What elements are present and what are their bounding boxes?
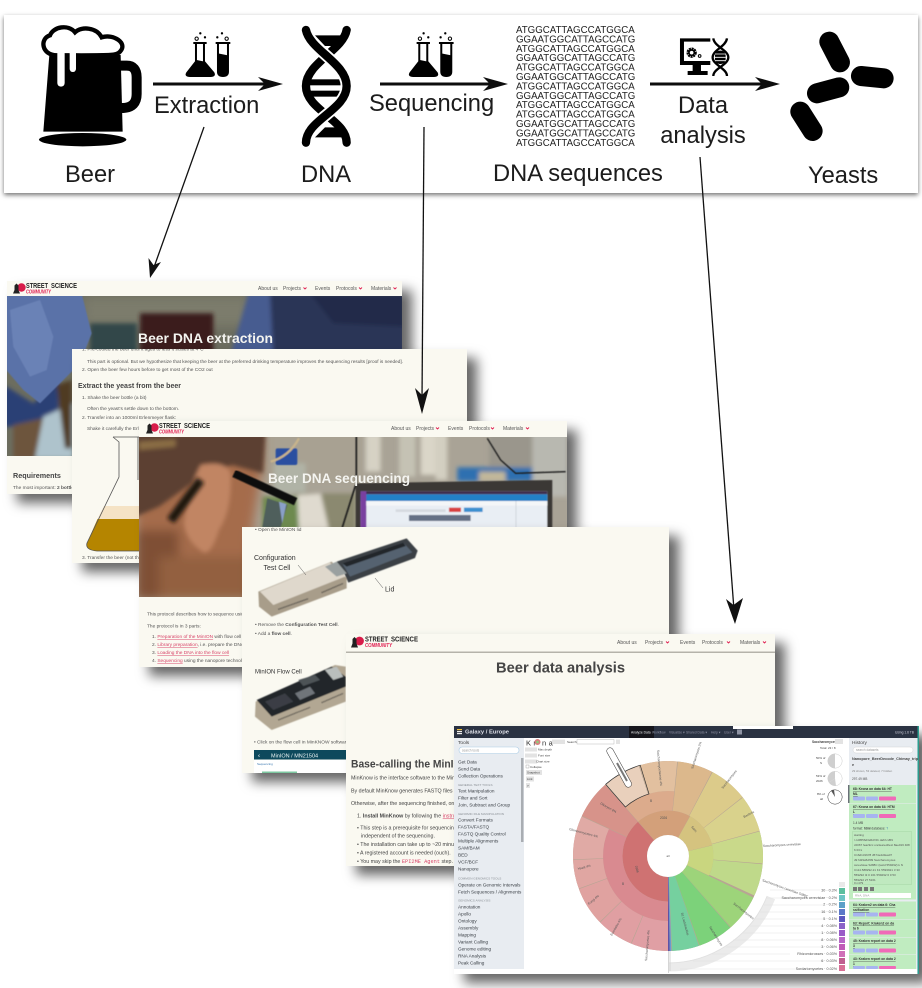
- heading: Beer DNA sequencing: Beer DNA sequencing: [268, 471, 410, 486]
- tools panel: GENOMIC FILE MANIPULATION: [458, 812, 504, 816]
- text: base-calling instructions: 1. Install MinKnow by following the instructions: [357, 814, 470, 820]
- Krona chart labels: Saccharomyces: [721, 769, 738, 790]
- navigation: Protocols: [336, 286, 357, 292]
- text: protocol introduction: The protocol is in 3 parts:: [147, 624, 201, 630]
- history dataset items: 64: Kraken2 on data 6: Cha: [853, 903, 895, 907]
- history dataset items: C16d131678 d574e4d3ea07: [854, 853, 892, 857]
- history dataset items: d9 fd29a5df09 Saccharomyces: [854, 858, 896, 862]
- navigation: About us: [617, 640, 637, 646]
- text block: DNA sequences: ATGGCATTAGCCATGGCA: [516, 44, 635, 55]
- tools panel: search tools: [462, 748, 480, 752]
- tools panel: FASTQ Quality Control: [458, 832, 506, 836]
- panel: MinION flow cell page: [242, 527, 669, 773]
- Krona legend: 1 · 0.08%: [821, 931, 838, 935]
- Krona legend: 2 · 0.2%: [823, 902, 838, 906]
- Krona chart labels: Saccharomycetes 4%: [644, 930, 651, 961]
- ring: species level: [573, 761, 678, 951]
- text: extraction steps: [82, 395, 179, 561]
- navigation: [258, 286, 396, 292]
- text: extraction steps: 2. Transfer into an 1000ml Erlenmeyer flask:: [82, 415, 176, 421]
- tools panel: Get Data: [458, 760, 477, 764]
- label: Beer: Beer: [65, 162, 115, 188]
- Krona controls: na: [542, 738, 555, 748]
- history dataset items: 1.4 MB: [853, 821, 863, 825]
- selected segment outline: [606, 765, 649, 807]
- illustration: Erlenmeyer flask: [86, 436, 139, 552]
- text block: DNA sequences: ATGGCATTAGCCATGGCA: [516, 63, 635, 74]
- text block: DNA sequences: ATGGCATTAGCCATGGCA: [516, 100, 635, 111]
- header bar: [346, 636, 775, 653]
- tools panel: Ontology: [458, 918, 477, 924]
- text: protocol introduction: 4. Sequencing using the nanopore technolog: [152, 658, 248, 664]
- logo: Street Science Community: SCIENCE: [391, 634, 418, 643]
- Krona controls: Search:: [567, 740, 578, 744]
- navigation: Materials: [740, 640, 761, 646]
- text: requirements intro: The most important: 2 bottles: [13, 485, 77, 491]
- text: protocol introduction: 1. Preparation of the MinION with flow cell a: [152, 634, 246, 640]
- Krona legend: Rhizomicrosses · 0.03%: [797, 952, 838, 956]
- Krona details and pies: 2026: [816, 779, 823, 783]
- icon: flask and tube for sequencing: [410, 32, 454, 76]
- tools panel: Multiple Alignments: [458, 838, 499, 844]
- text: protocol introduction: [147, 612, 248, 664]
- ring: genus level: [603, 791, 674, 921]
- history dataset items: 559292 t3 0 161 559292 6 0 53: [854, 873, 896, 877]
- navigation: Protocols: [702, 640, 723, 646]
- Krona chart labels: all: [666, 854, 670, 858]
- text: protocol introduction: This protocol describes how to sequence using: [147, 612, 247, 618]
- tools panel: Nanopore: [458, 866, 479, 872]
- panel: Beer DNA sequencing page: [136, 421, 572, 667]
- screenshot: MinKNOW header: ‹: [258, 754, 260, 760]
- label: Data analysis: analysis: [660, 123, 746, 149]
- logo: Street Science Community: SCIENCE: [184, 423, 210, 430]
- Krona controls: Chart size: [536, 760, 550, 764]
- panel: workflow overview: [4, 15, 918, 193]
- text: click flow cell: • Click on the flow cell in MinKNOW software: [254, 740, 349, 746]
- tools panel: Peak Calling: [458, 960, 485, 966]
- history dataset items: 0 n479: [854, 881, 864, 885]
- history dataset items: / cd9556d3a5d7db da6f cd59: [854, 838, 893, 842]
- Krona legend: 5 · 0.1%: [823, 917, 838, 921]
- text: base-calling instructions: • A registered account is needed (ouch).: [357, 850, 451, 856]
- Krona details and pies: all: [820, 797, 823, 801]
- Krona controls: Collapse: [530, 765, 542, 769]
- logo: Street Science Community: SCIENCE: [51, 283, 77, 290]
- tools panel: [454, 738, 524, 974]
- Galaxy top bar: Shared Data ▾: [686, 730, 707, 734]
- tools panel: Apollo: [458, 912, 471, 916]
- Krona chart labels: Eurotiales 4%: [609, 917, 623, 936]
- history dataset items: ML: [853, 792, 858, 796]
- tools panel: Convert Formats: [458, 818, 494, 822]
- text: protocol steps: This part is optional. But we hypothesize that keeping the beer at the preferred drinking temperature improves the sequencing results [proof is needed].: [87, 359, 403, 365]
- Krona chart labels: Saccharomyces cerevisiae S288C: [762, 878, 809, 899]
- tools panel: Assembly: [458, 926, 479, 930]
- label: Extraction: Extraction: [154, 93, 259, 119]
- Krona legend: 3 · 0.06%: [821, 945, 838, 949]
- icon: beer mug: [39, 27, 137, 146]
- text: base-calling instructions: independent of the sequencing.: [361, 834, 435, 840]
- navigation: Materials: [503, 426, 524, 432]
- tools panel: RNA Analysis: [458, 954, 487, 958]
- Krona controls: [525, 738, 620, 788]
- logo: Street Science Community: COMMUNITY: [26, 289, 52, 295]
- history dataset items: 559292 27 5161: [854, 878, 876, 882]
- Krona chart labels: Dikaryon 8%: [600, 801, 617, 814]
- text: remove and add instructions: • Add a flow cell.: [255, 631, 292, 637]
- navigation: Projects: [645, 640, 664, 646]
- Krona chart labels: Saccharomyces cerevisiae: [763, 842, 801, 848]
- history panel: History: [852, 740, 868, 746]
- callout lines: [298, 565, 383, 588]
- Galaxy top bar: Analyze Data: [631, 730, 651, 734]
- Krona legend: 6 · 0.03%: [821, 959, 838, 963]
- tools panel: GENERAL TEXT TOOLS: [458, 783, 493, 787]
- history panel: [848, 726, 919, 974]
- arrow: extraction to extraction page: [148, 127, 204, 278]
- photo: gloved hands: [3, 293, 405, 458]
- Krona details and pies: 8% of: [817, 792, 825, 796]
- history dataset items: ta 6: [853, 926, 859, 930]
- label: DNA sequences: DNA sequences: [493, 161, 663, 187]
- label: Data analysis: Data: [678, 93, 729, 119]
- text: protocol steps: 1. Pre-cooled the beer until it ages to less it scales at 4°C: [82, 346, 204, 352]
- Krona chart labels: Saccharomycetes: [732, 902, 755, 921]
- tools panel: Genome editing: [458, 946, 491, 952]
- Krona chart labels: B1 Lactobacillus: [680, 912, 690, 936]
- navigation: Materials: [371, 286, 392, 292]
- screenshot: MinKNOW header: MinION / MN21504: [271, 754, 318, 760]
- panel: Galaxy Europe Krona screenshot: [454, 712, 919, 988]
- history dataset items: 3: [853, 944, 855, 948]
- logo: Street Science Community: COMMUNITY: [159, 429, 185, 435]
- tools panel: FASTA/FASTQ: [458, 824, 490, 830]
- photo: MinION flow cell: [255, 665, 346, 730]
- text: base-calling instructions: • You may skip the EPI2ME Agent step.: [357, 859, 453, 865]
- history dataset items: ssification: [853, 908, 869, 912]
- Krona chart labels: Sacc: [690, 825, 698, 833]
- wedges spanning genus and species: [582, 762, 763, 896]
- history dataset items: [848, 785, 917, 974]
- Galaxy top bar: Visualize ▾: [669, 730, 685, 734]
- text block: DNA sequences: ATGGCATTAGCCATGGCA: [516, 110, 635, 121]
- screenshot: MinKNOW header: [254, 750, 346, 773]
- label: DNA: DNA: [301, 162, 351, 188]
- history dataset items: 67: Krona on data 64: HTM: [853, 805, 895, 809]
- history dataset items: 68: Krona on data 64: HT: [853, 787, 892, 791]
- Krona chart labels: B: [650, 799, 652, 803]
- tools panel: Filter and Sort: [458, 796, 488, 800]
- text: base-calling instructions: [351, 776, 454, 864]
- heading: Base-calling the MinION: Base-calling the MinION: [351, 758, 469, 770]
- text: base-calling instructions: Otherwise, after the sequencing finished, one: [351, 801, 457, 807]
- tools panel: SAM/BAM: [458, 846, 480, 850]
- tools panel: Mapping: [458, 932, 476, 938]
- Krona controls: Snapshot: [527, 770, 540, 774]
- Krona legend: Saccharomyces cerevisiae · 0.2%: [781, 896, 838, 900]
- tools panel: Fetch Sequences / Alignments: [458, 890, 522, 894]
- tools panel: BED: [458, 852, 468, 858]
- text block: DNA sequences: GGAATGGCATTAGCCATG: [516, 53, 635, 64]
- panel: Beer data analysis page: [346, 634, 775, 866]
- logo: Street Science Community: COMMUNITY: [365, 643, 393, 649]
- heading: Beer data analysis: Beer data analysis: [496, 660, 625, 676]
- Krona chart labels: Glomeromycetes 4%: [569, 827, 599, 839]
- logo: Street Science Community: STREET: [365, 634, 388, 643]
- Krona legend: 30 · 0.3%: [821, 888, 838, 892]
- Galaxy top bar: Using 1.6 TB: [895, 730, 915, 734]
- Krona sunburst chart: [573, 748, 763, 951]
- Krona legend: 4 · 0.08%: [821, 924, 838, 928]
- Krona chart labels: 2026: [660, 816, 667, 820]
- wedges spanning all rings: [668, 866, 754, 951]
- history panel: 297.49 MB: [852, 777, 867, 781]
- arrow: data analysis to analysis page: [700, 157, 743, 624]
- label: MinION Flow Cell: MinION Flow Cell: [255, 670, 302, 676]
- history dataset items: 45: Kraken report on data 2: [853, 939, 896, 943]
- navigation: About us: [391, 426, 411, 432]
- arrow: extraction: [153, 77, 283, 91]
- Krona details and pies: [812, 739, 845, 887]
- tools panel: Variant Calling: [458, 940, 489, 944]
- Krona controls: Max depth: [538, 748, 552, 752]
- panel: yeast extraction protocol page: [72, 346, 467, 563]
- history dataset items: C114.588292.21 K1 5593921 3 33: [854, 868, 900, 872]
- label: Configuration Test Cell: Test Cell: [264, 565, 291, 572]
- centre hole: [647, 835, 689, 877]
- text block: DNA sequences: [516, 25, 635, 149]
- tools panel: Annotation: [458, 904, 481, 910]
- history dataset items: 6 03 k: [854, 848, 863, 852]
- navigation: Events: [315, 286, 331, 292]
- text: extraction steps: 1. Shake the beer bottle (a bit): [82, 395, 147, 401]
- header bar: [139, 421, 567, 436]
- logo: Street Science Community: [146, 423, 210, 435]
- icon: DNA helix: [306, 30, 347, 143]
- navigation: Projects: [416, 426, 435, 432]
- Krona controls: Font size: [538, 754, 551, 758]
- Krona controls: Link: [527, 777, 533, 781]
- text: open the lid: • Open the MinION lid: [255, 527, 302, 533]
- heading: Requirements: Requirements: [13, 471, 61, 480]
- header bar: [7, 281, 402, 296]
- text block: DNA sequences: GGAATGGCATTAGCCATG: [516, 128, 635, 139]
- Krona controls: Kr: [526, 738, 538, 748]
- text: base-calling instructions: • This step is a prerequisite for sequencing: [357, 826, 457, 832]
- Krona legend leader lines: [680, 890, 824, 969]
- tools panel: Send Data: [458, 766, 481, 772]
- history panel: e: [852, 763, 854, 767]
- history dataset items: 63: Report: Kraken2 on da: [853, 922, 894, 926]
- text: base-calling instructions: • The installation can take up to ~20 minutes: [357, 842, 461, 848]
- text block: DNA sequences: GGAATGGCATTAGCCATG: [516, 119, 635, 130]
- Krona chart labels: B: [622, 882, 624, 886]
- history dataset items: format: html database: ?: [853, 826, 888, 830]
- text: base-calling instructions: By default MinKnow generates FASTQ files (basecalled): [351, 788, 483, 794]
- navigation: [391, 426, 529, 432]
- text: extraction steps: 3. Transfer the beer (not the foam): [82, 555, 155, 561]
- history panel: 29 shown, 53 deleted, 7 hidden: [852, 769, 893, 773]
- tools panel: Tools: [458, 740, 470, 746]
- Krona chart labels: Bacteria: [743, 810, 755, 819]
- icon: yeasts: [800, 42, 884, 131]
- text: protocol steps: 2. Open the beer few hours before to get most of the CO2 out: [82, 367, 213, 373]
- heading: Extract the yeast from the beer: Extract the yeast from the beer: [78, 383, 181, 390]
- Galaxy top bar: Help ▾: [711, 730, 721, 734]
- tools panel: Operate on Genomic Intervals: [458, 882, 521, 888]
- text: base-calling instructions: MinKnow is the interface software to the MinION: [351, 776, 465, 782]
- Galaxy top bar: Galaxy / Europe: [465, 730, 509, 736]
- navigation: Projects: [283, 286, 302, 292]
- Galaxy top bar: Workflow: [652, 730, 666, 734]
- Krona chart labels: Saccharomyces 2%: [690, 741, 703, 769]
- icon: computer with DNA: [680, 38, 728, 76]
- navigation: [617, 640, 766, 645]
- logo: Street Science Community: [351, 636, 418, 648]
- text block: DNA sequences: GGAATGGCATTAGCCATG: [516, 91, 635, 102]
- text: extraction steps: Often the yeast's settle down to the bottom.: [87, 406, 179, 412]
- Galaxy top bar: User ▾: [724, 730, 734, 734]
- Krona legend: [781, 888, 845, 971]
- text: remove and add instructions: • Remove the Configuration Test Cell.: [255, 622, 339, 628]
- label: Data analysis: [660, 93, 746, 149]
- Krona chart labels: Saccharomyces: [708, 925, 724, 947]
- tools panel: GENOMICS ANALYSIS: [458, 898, 490, 902]
- text: protocol steps: [82, 349, 402, 372]
- history dataset items: RNA, DNA: [855, 894, 869, 898]
- icon: flask and tube for extraction: [187, 32, 230, 76]
- Krona legend: 8 · 0.06%: [821, 938, 838, 942]
- label: Configuration Test Cell: Configuration: [254, 555, 296, 562]
- text block: DNA sequences: GGAATGGCATTAGCCATG: [516, 34, 635, 45]
- Krona details and pies: 50% of: [816, 756, 826, 760]
- history dataset items: 1: [853, 962, 855, 966]
- text: remove and add instructions: [255, 622, 339, 635]
- navigation: Protocols: [469, 426, 490, 432]
- navigation: Events: [680, 640, 696, 646]
- tools panel: Collection Operations: [458, 774, 503, 778]
- text: protocol introduction: 2. Library preparation, i.e. prepare the DNA f: [152, 642, 247, 648]
- panel: Beer DNA extraction page: [3, 281, 405, 494]
- Krona legend: Sordariomycetes · 0.02%: [796, 967, 838, 971]
- tools panel: COMMON GENOMICS TOOLS: [458, 876, 501, 880]
- text block: DNA sequences: GGAATGGCATTAGCCATG: [516, 72, 635, 83]
- history dataset items: cerevisiae S288C (taxid 559292) k N: [854, 863, 903, 867]
- screenshot: MinKNOW header: Sequencing: [257, 762, 273, 766]
- tools panel: VCF/BCF: [458, 860, 478, 864]
- text block: DNA sequences: ATGGCATTAGCCATGGCA: [516, 25, 635, 36]
- navigation: Events: [448, 426, 464, 432]
- Krona chart labels: 2886: [634, 865, 640, 873]
- Krona details and pies: S: [820, 761, 822, 765]
- Krona chart labels: Saccharomycetaceae 4%: [656, 750, 663, 786]
- arrow: sequencing: [380, 77, 508, 91]
- Krona controls: ?: [527, 784, 529, 788]
- history panel: search datasets: [856, 748, 879, 752]
- photo: person at laptop in the lab: [136, 433, 572, 600]
- Krona details and pies: Total: 23 / 8: [820, 746, 836, 750]
- ring: domain level: [621, 809, 715, 903]
- Krona chart labels: Yeast 4%: [577, 864, 591, 871]
- heading: Beer DNA extraction: Beer DNA extraction: [138, 331, 273, 346]
- Krona chart shadow: [668, 896, 775, 973]
- tools panel: Text Manipulation: [458, 788, 495, 794]
- text: extraction steps: Shake it carefully the Erlenmeyer: [87, 426, 158, 432]
- Krona details and pies: 53% of: [816, 774, 826, 778]
- label: Yeasts: Yeasts: [808, 163, 878, 189]
- photo: configuration test cell: [258, 538, 418, 617]
- history dataset items: c0067 feac9cc uncleared/text 8ae016 408: [854, 843, 910, 847]
- tools panel: Join, Subtract and Group: [458, 802, 511, 808]
- text: protocol introduction: 3. Loading the DNA into the flow cell: [152, 650, 229, 656]
- label: Configuration Test Cell: [254, 555, 296, 572]
- selected segment callout: [610, 751, 628, 784]
- text block: DNA sequences: ATGGCATTAGCCATGGCA: [516, 81, 635, 92]
- history dataset items: 43: Kraken report on data 2: [853, 957, 896, 961]
- text block: DNA sequences: ATGGCATTAGCCATGGCA: [516, 138, 635, 149]
- history panel: Nanopore_BeerDecode_Chimay_trip: [852, 757, 919, 761]
- arrow: data analysis: [650, 77, 780, 91]
- history dataset items: starting: [854, 833, 864, 837]
- white notch above Galaxy panel: [733, 726, 793, 729]
- label: Lid: Lid: [385, 586, 394, 594]
- Krona legend: 16 · 0.1%: [821, 910, 838, 914]
- Krona chart labels: [569, 741, 809, 961]
- history dataset items: L: [853, 810, 855, 814]
- Krona chart labels: Fungi 4%: [587, 894, 600, 906]
- arrow: sequencing to sequencing page: [415, 127, 429, 414]
- navigation: About us: [258, 286, 278, 292]
- logo: Street Science Community: STREET: [159, 423, 182, 430]
- logo: Street Science Community: [13, 283, 77, 295]
- logo: Street Science Community: STREET: [26, 283, 49, 290]
- Krona details and pies: Saccharomyces: [812, 740, 837, 744]
- label: Sequencing: Sequencing: [369, 91, 494, 117]
- Galaxy top bar: [454, 726, 919, 738]
